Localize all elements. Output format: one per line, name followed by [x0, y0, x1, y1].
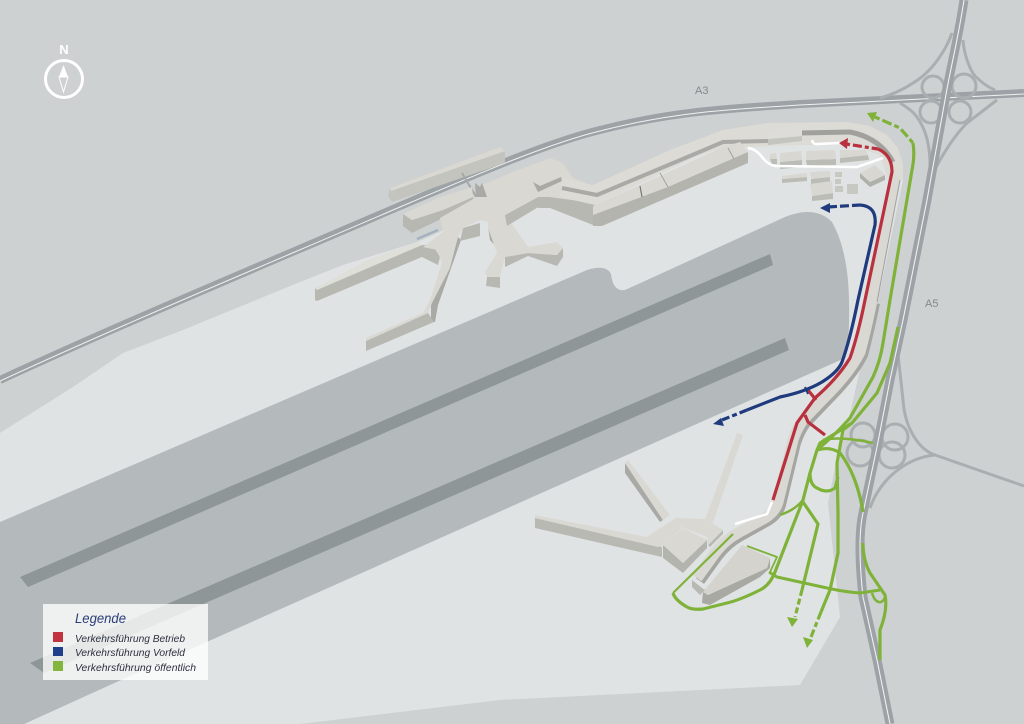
west pier — [535, 518, 662, 557]
central block — [708, 530, 723, 547]
service buildings — [770, 150, 885, 201]
north interchange — [880, 33, 997, 173]
north terminal complex — [315, 158, 595, 351]
legend item: operations: Verkehrsführung Betrieb — [75, 633, 185, 645]
south car park building — [702, 545, 770, 605]
legend panel — [43, 604, 208, 680]
runway south — [30, 338, 789, 673]
south pier top — [485, 214, 563, 277]
A5 label: A5 — [925, 298, 938, 310]
access road south section — [697, 175, 900, 581]
runway apron area — [0, 212, 849, 724]
northwest pier — [625, 463, 663, 522]
legend heading: Legende — [75, 610, 126, 626]
northeast pier — [705, 433, 743, 523]
road end block — [692, 580, 705, 595]
compass ring — [46, 60, 82, 98]
block west — [403, 210, 443, 233]
runway north — [20, 254, 773, 587]
front block — [663, 540, 707, 573]
A3 label: A3 — [695, 85, 708, 97]
route: operations (red) — [773, 138, 892, 500]
arrowhead southwest — [713, 418, 724, 426]
route: apron (blue) — [713, 203, 875, 426]
compass — [46, 42, 82, 98]
southwest pier end — [366, 313, 434, 351]
south pier side faces — [505, 248, 563, 267]
south interchange — [847, 345, 1024, 508]
arrowhead south east — [803, 637, 813, 648]
blue strip — [417, 230, 438, 239]
north rail station — [388, 147, 505, 202]
legend item: apron: Verkehrsführung Vorfeld — [75, 647, 186, 659]
legend item: public: Verkehrsführung öffentlich — [75, 662, 196, 674]
access road north section — [560, 122, 903, 205]
arrowhead — [839, 138, 848, 149]
motorway A5 — [860, 0, 964, 724]
arrowhead south west — [787, 617, 798, 627]
white service roads — [735, 140, 883, 524]
compass needle — [59, 65, 68, 77]
motorway A3 — [0, 93, 1024, 381]
block east — [443, 197, 473, 216]
east pier — [593, 142, 748, 226]
airfield light ground — [0, 124, 903, 724]
legend — [43, 604, 208, 680]
arrowhead north — [820, 203, 830, 213]
road block — [768, 136, 802, 145]
southwest pier shade — [431, 237, 461, 322]
hall side faces — [505, 197, 540, 226]
arrowhead north — [867, 112, 877, 122]
hall and southwest pier top — [366, 158, 595, 341]
route: public (green) — [673, 112, 914, 660]
west pier — [315, 245, 440, 301]
compass letter: N — [59, 42, 69, 57]
south terminal complex — [535, 433, 743, 573]
